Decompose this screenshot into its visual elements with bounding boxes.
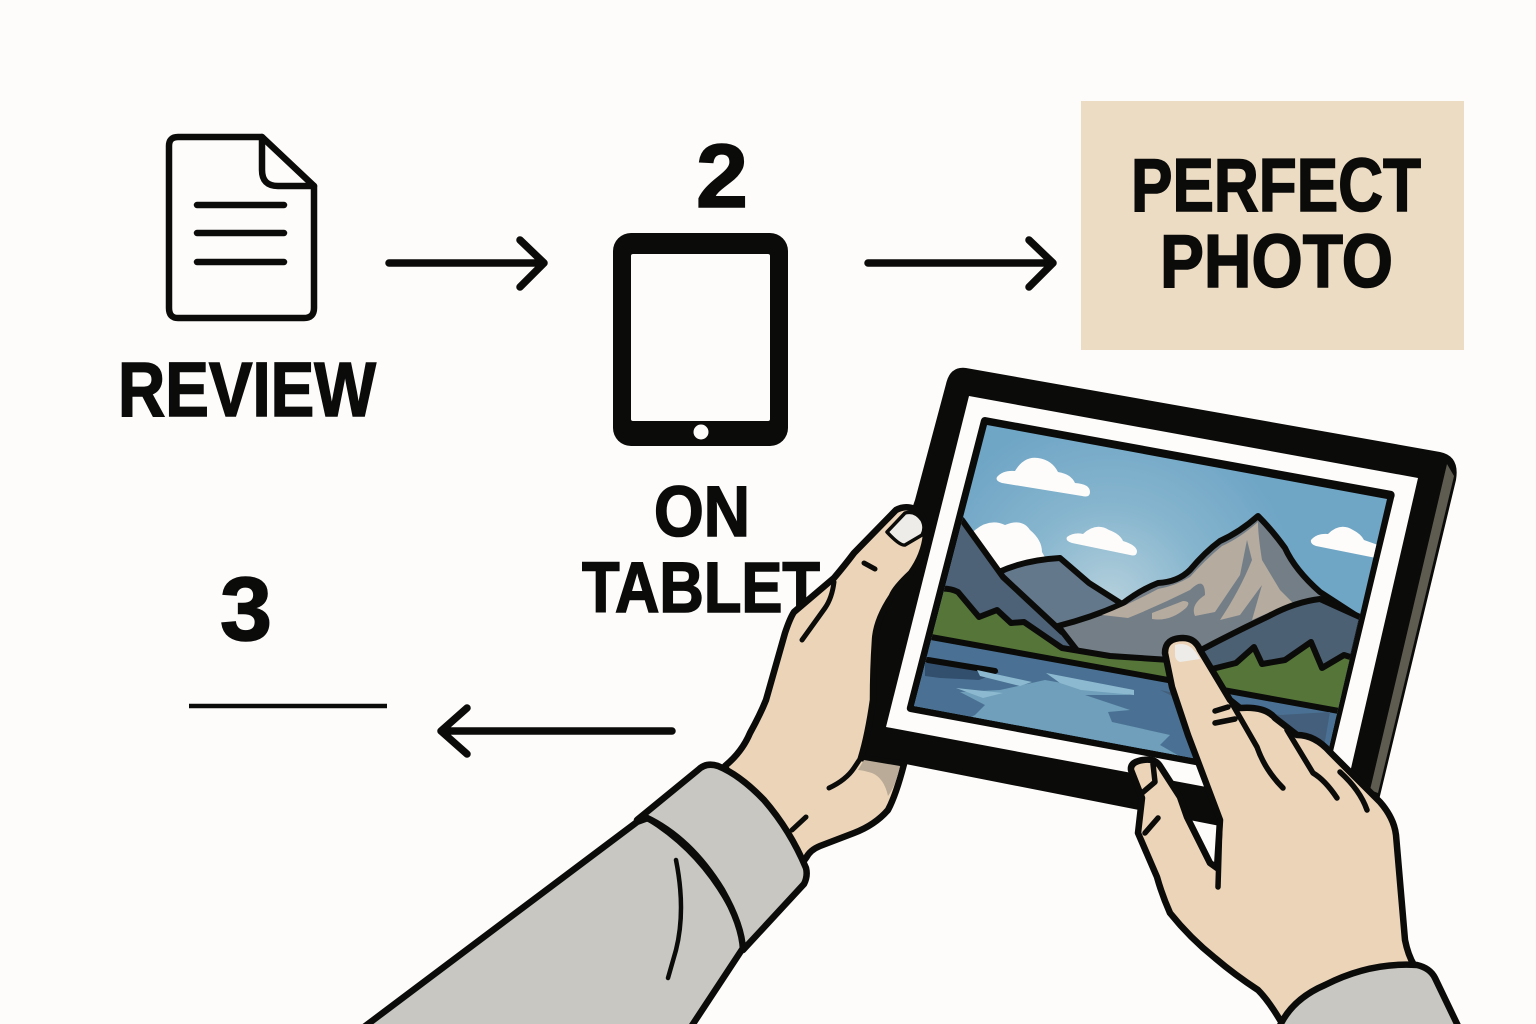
arrow: tablet to perfect photo	[868, 240, 1053, 287]
blank line	[189, 704, 387, 708]
right hand finger lines	[1142, 650, 1367, 887]
lake	[914, 634, 1338, 758]
thumb nail	[887, 512, 924, 545]
left hand creases	[792, 563, 875, 830]
left mountain	[932, 517, 1070, 646]
icon: tablet	[613, 233, 788, 446]
tablet side edge	[1370, 464, 1454, 793]
label: on tablet: TABLET	[582, 549, 820, 628]
left hand	[725, 507, 926, 880]
lake shadows and ripples	[925, 660, 1000, 680]
green hills	[926, 586, 1166, 677]
palm shadow	[858, 760, 900, 796]
photo frame	[907, 417, 1395, 789]
tablet screen	[886, 396, 1418, 812]
right mountain	[1201, 599, 1362, 690]
left sleeve	[360, 765, 807, 1024]
panel: perfect photo: PERFECT	[1131, 143, 1421, 227]
label: on tablet: ON	[654, 473, 750, 552]
panel: perfect photo: PHOTO	[1160, 219, 1393, 303]
icon: document	[169, 137, 314, 318]
number 3: 3	[220, 560, 272, 660]
arrow: review to tablet	[389, 240, 544, 287]
label: on tablet	[582, 473, 820, 628]
back mountain	[1000, 555, 1122, 624]
label: review: REVIEW	[118, 347, 376, 433]
right sleeve	[1278, 965, 1460, 1024]
landscape photo	[914, 425, 1387, 758]
tablet body	[856, 368, 1457, 826]
right hand	[1131, 638, 1440, 1024]
main mountain	[1057, 513, 1360, 656]
index finger nail	[1175, 644, 1200, 662]
arrow: back to step 3	[441, 708, 672, 754]
lake light water	[960, 680, 1178, 756]
number 2: 2	[696, 127, 748, 227]
snow patches	[1102, 522, 1295, 620]
clouds	[974, 458, 1376, 568]
panel: perfect photo	[1081, 101, 1464, 350]
illustration: tablet held in hands	[360, 368, 1460, 1024]
